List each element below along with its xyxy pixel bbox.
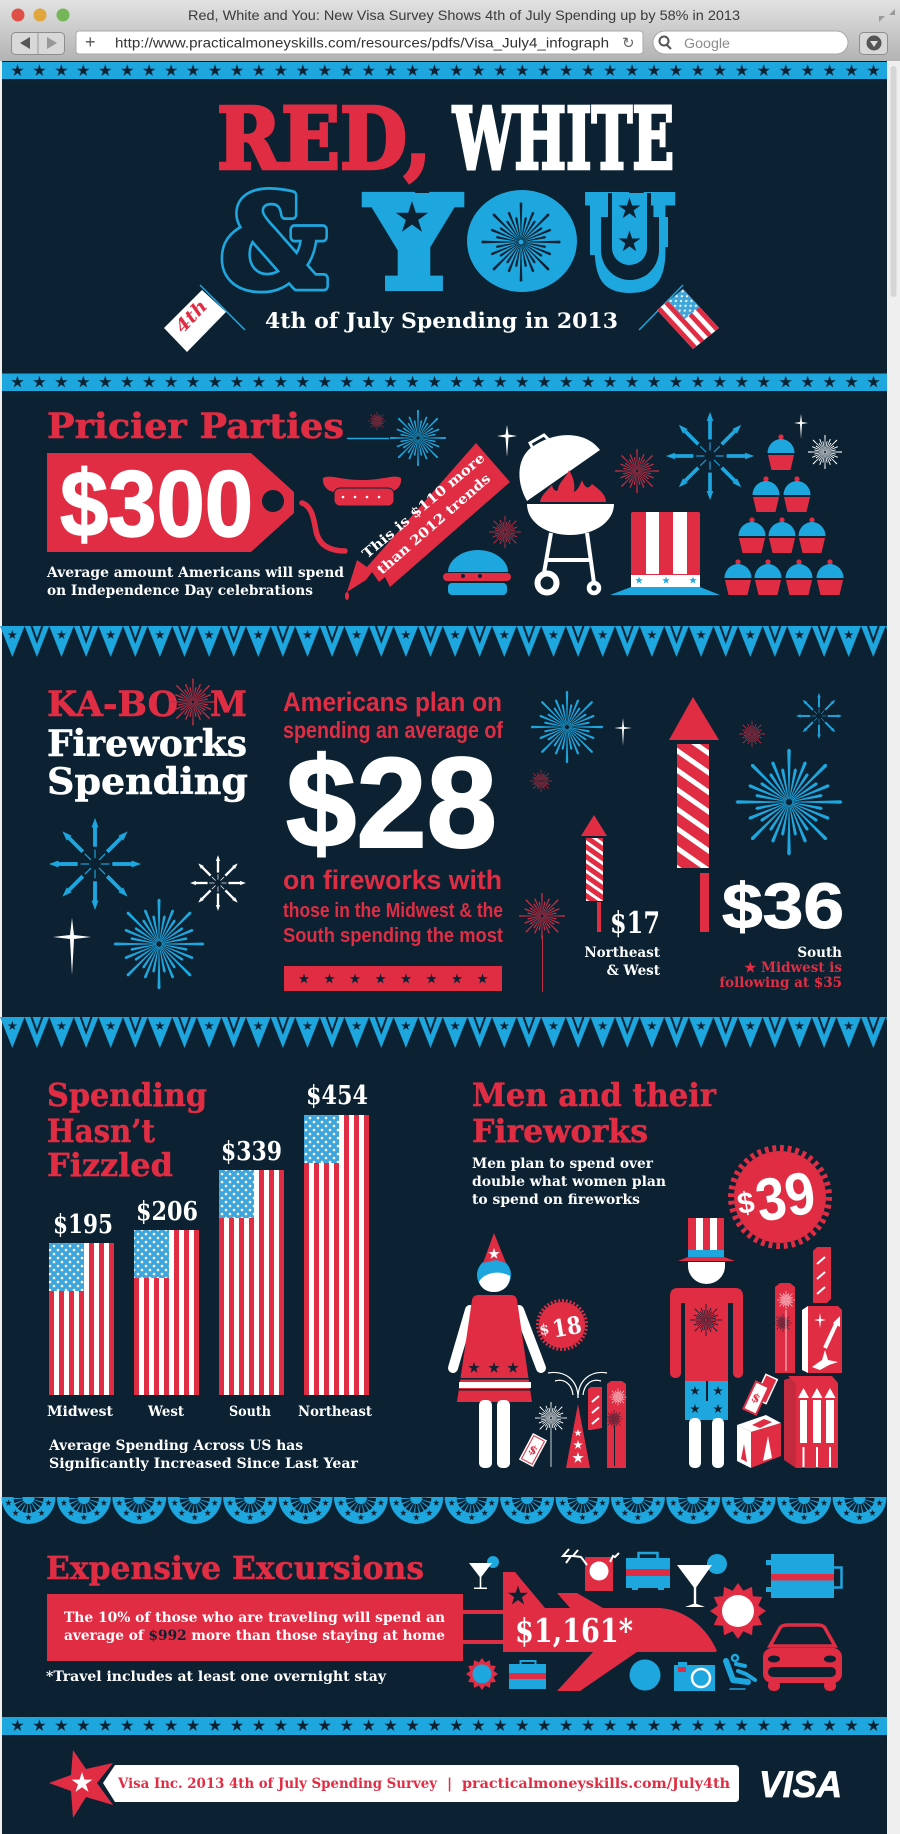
big box with rockets [784, 1376, 838, 1468]
download button [860, 32, 888, 54]
ribbon: mustard banner: than 2012 trends [374, 471, 494, 578]
panel: pricier parties [46, 406, 843, 600]
badge: $18: 18 [550, 1310, 584, 1343]
red star bar [284, 966, 502, 991]
firework: red with stem [519, 893, 565, 992]
logo: Visa: VISA [759, 1764, 842, 1805]
title: WHITE: WHITE [452, 90, 674, 190]
resize corner [879, 9, 895, 22]
icon: sun [710, 1583, 766, 1639]
man: head [688, 1262, 725, 1284]
firework: small blue arrows [796, 693, 842, 739]
callout: $28 average [283, 687, 503, 947]
chart: small rocket $17: $17 [610, 906, 660, 941]
icon: small martini [469, 1556, 499, 1589]
top thin box [813, 1247, 831, 1303]
firework: blue right top [531, 691, 603, 763]
man: legs [689, 1418, 724, 1468]
chart: large rocket $36 [669, 697, 844, 991]
badge: $39: 39 [751, 1158, 820, 1235]
underline [347, 438, 389, 440]
bar labels [47, 1404, 373, 1420]
firework: blue [390, 410, 446, 466]
footer [49, 1750, 842, 1818]
window title: Red, White and You: New Visa Survey Shows 4th of July Spending up by 58% in 2013 [188, 8, 740, 23]
firework: blue [114, 899, 204, 989]
title: O with burst: O [470, 169, 574, 319]
firework: white [808, 435, 842, 469]
heading [472, 1076, 717, 1150]
icon: small suitcase [509, 1661, 546, 1689]
footer bar: Visa Inc. 2013 4th of July Spending Survey [117, 1776, 438, 1792]
heading: fireworks spending: Fireworks [47, 723, 247, 765]
panel: expensive excursions [46, 1549, 842, 1691]
chart: large rocket $36: following at $35 [719, 975, 842, 991]
heading: Men and their [472, 1076, 717, 1114]
banner pulled by plane [47, 1594, 463, 1661]
firework: big blue [735, 748, 843, 856]
bar: midwest [49, 1210, 114, 1395]
ticket: $ [526, 1442, 540, 1458]
chart: small rocket $17: & West [607, 963, 661, 979]
bar labels: South [229, 1404, 271, 1420]
firework: blue arrows left [49, 818, 141, 910]
firework: blue arrows [666, 412, 754, 500]
firework: small dark red [739, 721, 765, 747]
firework: red by burger [489, 516, 521, 548]
search box: Google [684, 36, 730, 51]
heading: ka-boom [47, 678, 247, 726]
icon: grill [519, 435, 614, 593]
man: torso with arms [670, 1288, 743, 1381]
address bar: + [85, 32, 96, 52]
small crate [737, 1415, 781, 1468]
icon: burger [443, 550, 511, 595]
middle box with rocket [802, 1306, 842, 1373]
caption [46, 565, 344, 599]
bar: west [134, 1197, 199, 1395]
woman's fireworks [519, 1372, 627, 1468]
figure: woman [453, 1233, 541, 1468]
body text [472, 1156, 666, 1208]
bar: west: $206 [136, 1197, 198, 1227]
badge: $18 [537, 1300, 586, 1350]
caption: Average amount Americans will spend [46, 565, 344, 581]
heading: pricier parties: Pricier Parties [47, 406, 344, 447]
panel: spending hasn't fizzled [47, 1076, 373, 1472]
price: $300: $300 [60, 451, 253, 556]
chart: small rocket $17 [581, 815, 661, 979]
heading: ka-boom: KA-BO [47, 684, 178, 725]
footer bar: practicalmoneyskills.com/July4th [462, 1776, 730, 1792]
caption: on Independence Day celebrations [47, 583, 313, 599]
fountain arcs [548, 1372, 607, 1398]
star band bottom [2, 1717, 887, 1735]
cone firework [566, 1404, 590, 1468]
heading: Spending [47, 1076, 207, 1114]
chart caption [48, 1438, 359, 1472]
ribbon: mustard banner [345, 443, 510, 600]
banner pulled by plane: average of $992 more than those staying at home [64, 1628, 445, 1644]
star band 2 [2, 374, 887, 391]
icon: blue ball [630, 1660, 660, 1690]
callout: $28 average: those in the Midwest & the [283, 900, 503, 922]
icon: car seat [726, 1655, 755, 1689]
title: Y with star: Y [365, 171, 461, 317]
footer bar [103, 1765, 739, 1802]
title: ampersand: & [221, 168, 326, 316]
figure: man [670, 1218, 743, 1468]
bar: south: $339 [221, 1137, 282, 1167]
icon: uncle sam hat [610, 512, 720, 595]
body text: double what women plan [472, 1174, 666, 1190]
bunting: pennants 1 [0, 626, 887, 657]
icon: blue suitcase [626, 1553, 670, 1590]
firework: white arrows [190, 855, 246, 911]
chart: large rocket $36: ★ Midwest is [744, 960, 842, 976]
icon: big suitcase [766, 1554, 842, 1598]
firework: red by grill [615, 449, 659, 493]
amount: $1,161*: $1,161* [515, 1611, 633, 1650]
traffic light buttons [12, 8, 70, 22]
ribbon: mustard banner: This is $110 more [359, 450, 488, 562]
title: ampersand: & [221, 168, 326, 316]
callout: $28 average: Americans plan on [283, 687, 502, 717]
callout: $28 average: on fireworks with [283, 865, 502, 895]
heading: Fizzled [47, 1146, 173, 1184]
amount: $28: $28 [286, 732, 497, 875]
icon: large martini [677, 1554, 727, 1607]
heading: fireworks spending [47, 723, 248, 803]
icon: small sun [466, 1658, 498, 1690]
chart caption: Significantly Increased Since Last Year [49, 1456, 359, 1472]
sparkle small [794, 414, 808, 439]
bunting: half circles [0, 1497, 887, 1525]
callout: $28 average: spending an average of [283, 717, 503, 743]
address bar: ↻ [622, 35, 635, 52]
chart: small rocket $17: Northeast [584, 945, 661, 961]
man's firework boxes [737, 1247, 842, 1468]
sparkler white [535, 1402, 567, 1467]
icon: camera [674, 1662, 715, 1691]
bar: south [219, 1137, 284, 1395]
address bar: http://www.practicalmoneyskills.com/resources/pdfs/Visa_July4_infograph [115, 36, 609, 50]
tickets: $ [749, 1390, 763, 1406]
woman: arms [453, 1310, 541, 1368]
address bar [76, 31, 643, 54]
heading: Expensive Excursions [46, 1549, 424, 1587]
title [217, 90, 675, 319]
small box firework [588, 1387, 602, 1430]
woman: legs [479, 1400, 510, 1468]
title: U with stars: U [584, 169, 675, 318]
icon: car [763, 1625, 842, 1691]
icon: cupcake pyramid [724, 434, 844, 595]
tall box firework [605, 1381, 627, 1468]
woman: head and hair [477, 1258, 511, 1292]
star band top [2, 62, 887, 79]
bar labels: Midwest [47, 1404, 114, 1420]
badge: $39 [731, 1148, 829, 1246]
bar labels: West [147, 1404, 185, 1420]
badge: $18: $ [538, 1321, 551, 1339]
icon: camera flash [563, 1549, 619, 1591]
body text: to spend on fireworks [472, 1192, 640, 1208]
heading [47, 1076, 207, 1184]
sparkle right [614, 718, 632, 746]
panel: men and their fireworks [453, 1076, 842, 1468]
banner pulled by plane: The 10% of those who are traveling will spend an [64, 1610, 445, 1626]
search box [653, 31, 848, 54]
sparkle large [53, 918, 91, 975]
bar labels: Northeast [298, 1404, 373, 1420]
heading: fireworks spending: Spending [47, 761, 248, 803]
woman: party hat [483, 1233, 506, 1263]
panel: ka-boom [47, 678, 844, 992]
bar: midwest: $195 [53, 1210, 113, 1240]
tow lines [463, 1610, 505, 1644]
badge: $39: $ [735, 1186, 757, 1221]
browser chrome [0, 0, 900, 61]
sparkle [497, 425, 517, 457]
tickets [742, 1373, 778, 1416]
scrollbar [890, 66, 896, 297]
subtitle: 4th of July Spending in 2013 [265, 308, 618, 333]
chart caption: Average Spending Across US has [48, 1438, 303, 1454]
icon: hot dog [323, 477, 401, 506]
bar: northeast [304, 1081, 369, 1395]
heading: Fireworks [472, 1112, 648, 1150]
tall box [774, 1283, 795, 1373]
woman: dress [457, 1295, 532, 1402]
flag: 4th: 4th [171, 296, 212, 337]
bar: northeast: $454 [306, 1081, 368, 1111]
callout: $28 average: South spending the most [283, 925, 503, 947]
flag: stars and stripes [639, 285, 719, 349]
chart: large rocket $36: $36 [722, 870, 844, 942]
title: RED,: RED, [217, 90, 431, 190]
firework: small red [530, 770, 552, 792]
flag: 4th [164, 285, 245, 352]
footnote: *Travel includes at least one overnight stay [46, 1669, 387, 1685]
body text: Men plan to spend over [472, 1156, 654, 1172]
footer bar: | [447, 1776, 452, 1792]
bunting: pennants 2 [0, 1017, 887, 1048]
man: top hat [678, 1218, 735, 1261]
firework: small red [368, 412, 386, 430]
heading: Hasn’t [47, 1112, 155, 1150]
footer star logo [49, 1750, 113, 1818]
back and forward buttons [12, 32, 64, 54]
heading: ka-boom: M [210, 684, 247, 725]
plane [503, 1572, 717, 1691]
tag string [302, 503, 345, 551]
chart: large rocket $36: South [797, 945, 842, 961]
price tag [47, 451, 294, 556]
man: shorts [685, 1381, 728, 1420]
